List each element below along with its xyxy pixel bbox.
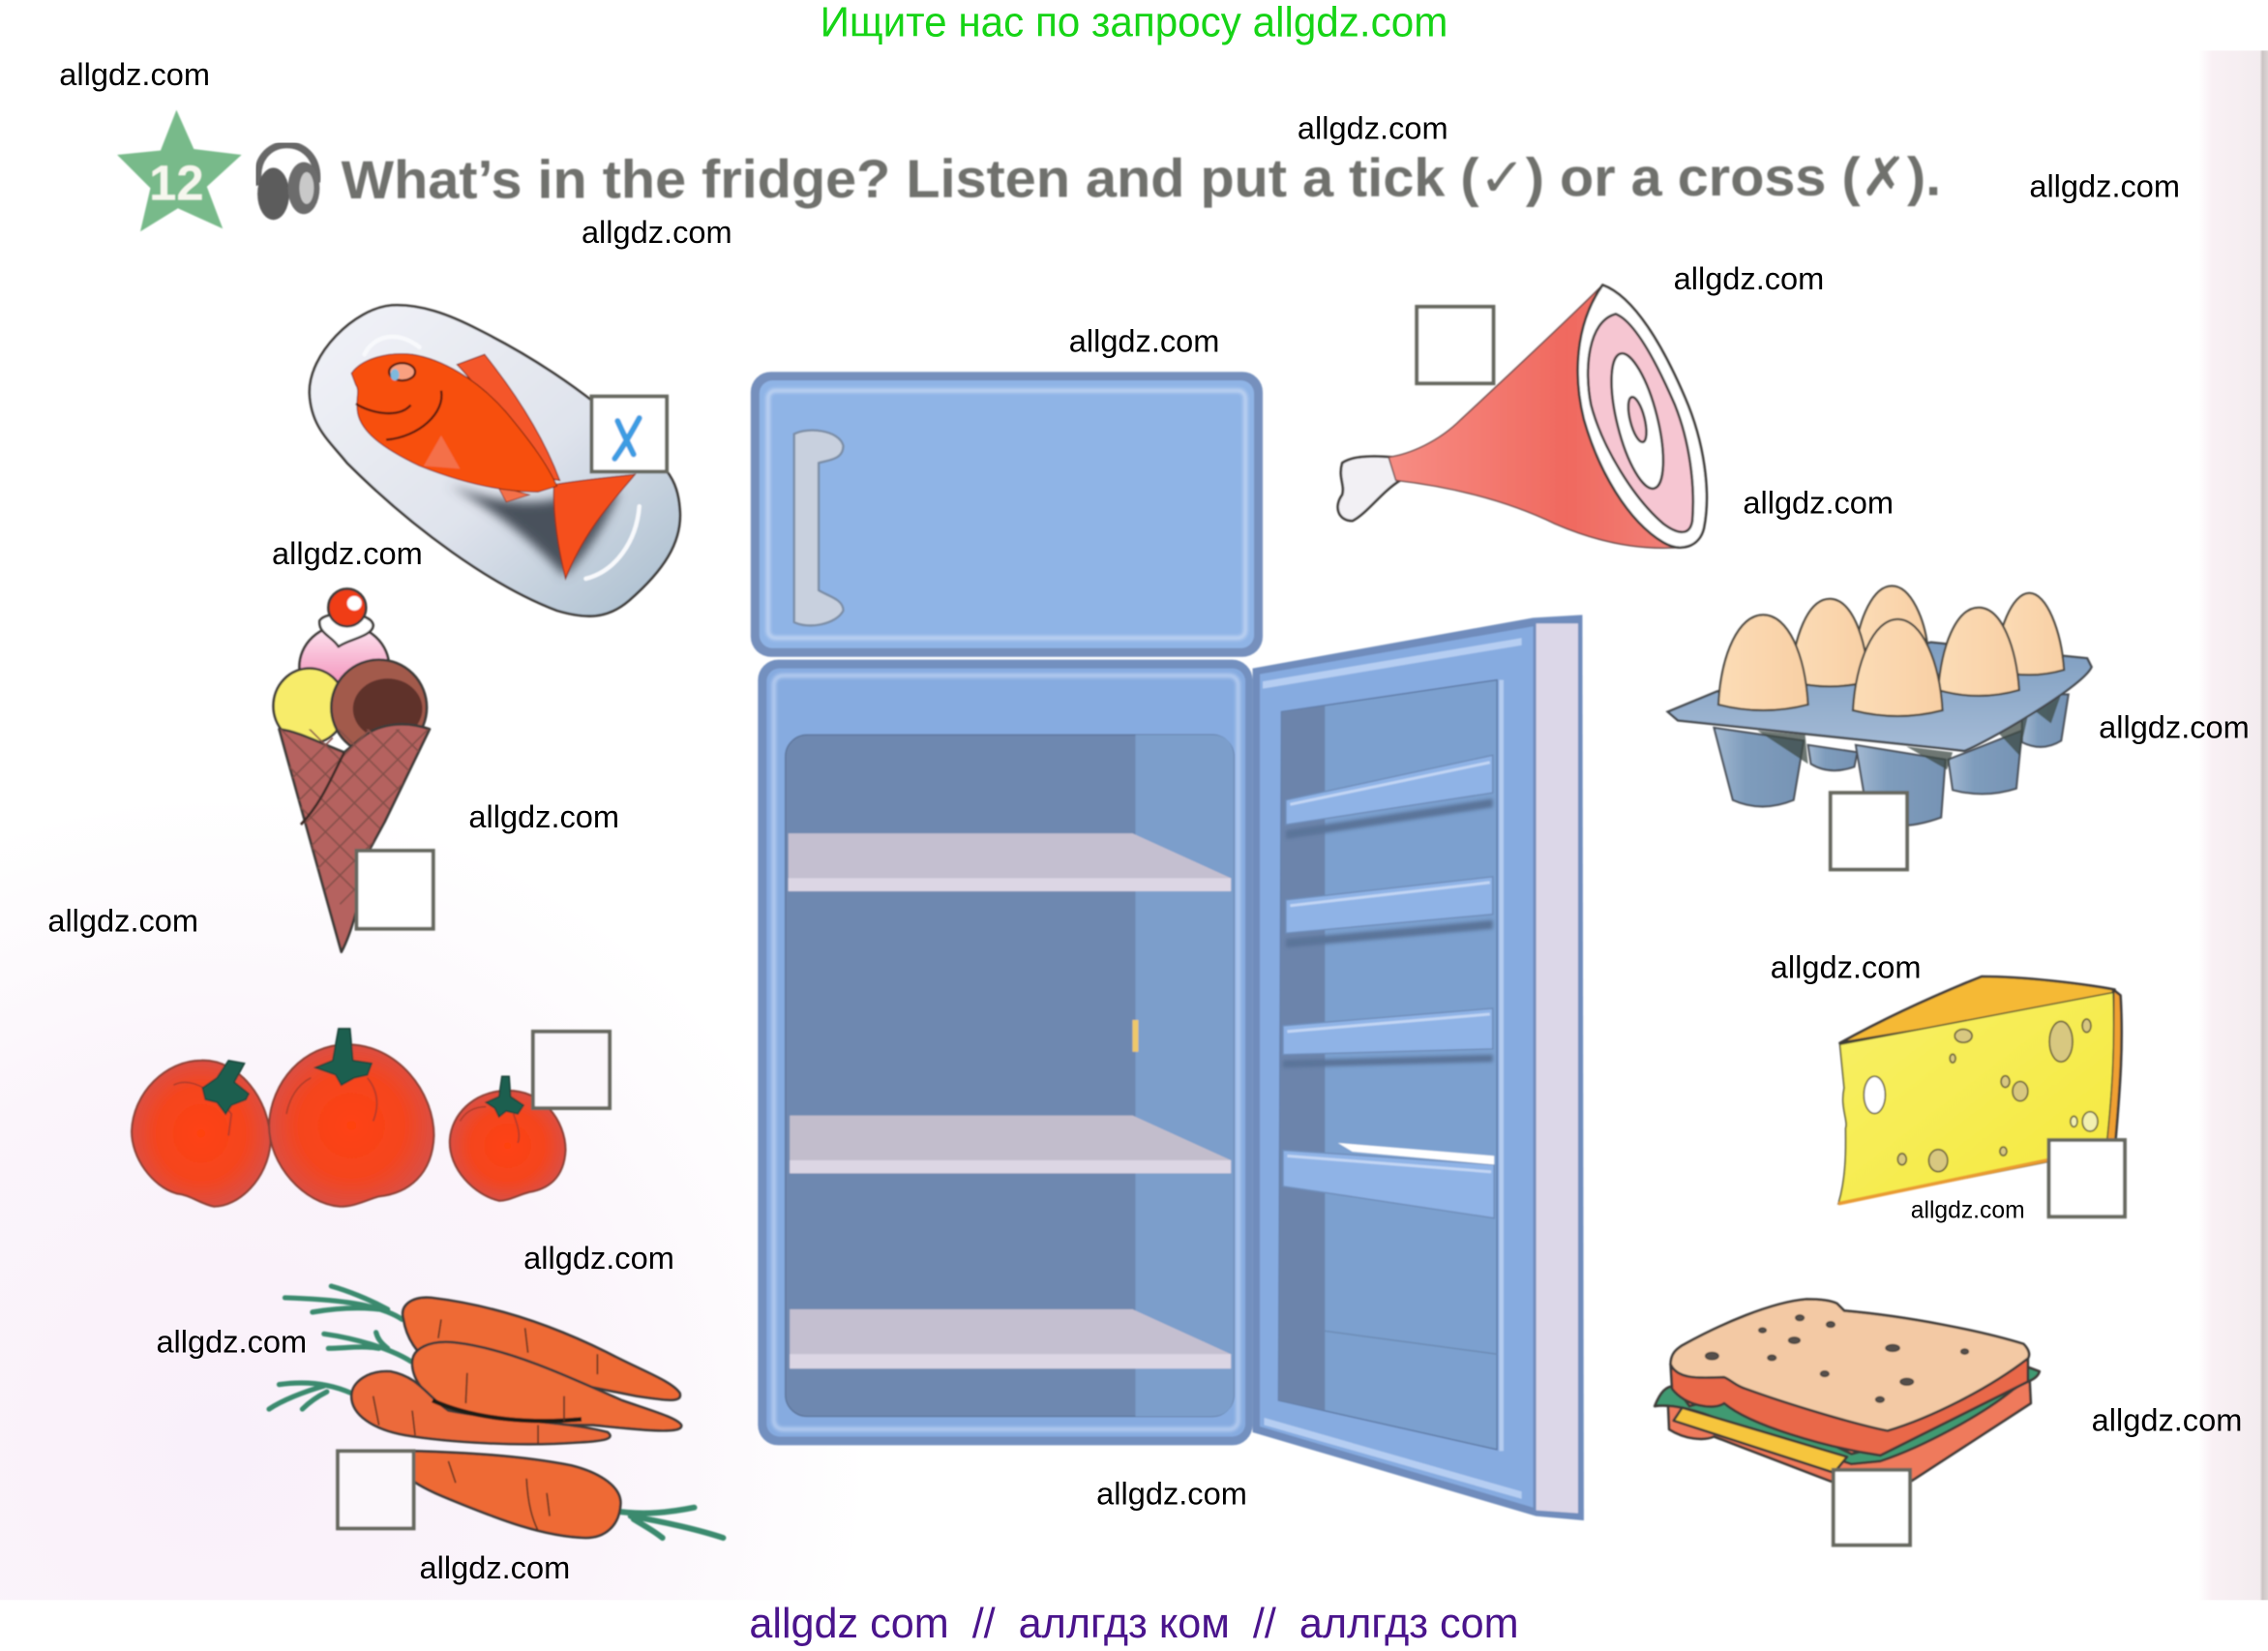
cheese right rind xyxy=(2104,990,2122,1150)
ham bone xyxy=(1338,457,1400,521)
checkbox xyxy=(533,1032,610,1108)
carrot two xyxy=(412,1342,681,1430)
open door xyxy=(1253,615,1584,1520)
tomato right xyxy=(450,1091,566,1201)
freezer handle xyxy=(794,431,844,625)
checkbox xyxy=(1831,793,1907,869)
door shelf three xyxy=(1283,1008,1493,1055)
fridge xyxy=(751,372,1584,1520)
shelf one xyxy=(789,833,1231,891)
item: fish on a plate xyxy=(310,305,680,616)
tomato left xyxy=(132,1061,271,1207)
watermarks: allgdz.com xyxy=(1069,323,1219,358)
tomato middle xyxy=(269,1044,433,1207)
exercise number star: 12 xyxy=(149,155,204,210)
watermarks: allgdz.com xyxy=(2099,709,2250,744)
top banner text: Ищите нас по запросу allgdz.com xyxy=(821,0,1447,45)
door shelf highlights xyxy=(1287,763,1491,1172)
scoops xyxy=(299,625,389,709)
watermarks: allgdz.com xyxy=(1911,1198,2025,1224)
door recess xyxy=(1278,680,1497,1450)
fish fins xyxy=(497,486,529,502)
checkbox xyxy=(356,851,433,929)
watermarks: allgdz.com xyxy=(1298,111,1448,146)
item: carrots xyxy=(269,1286,723,1538)
freezer door xyxy=(751,372,1263,657)
fish face details xyxy=(356,363,441,439)
watermarks: allgdz.com xyxy=(468,799,619,834)
waffle cone xyxy=(280,724,430,952)
item: sandwich xyxy=(1655,1299,2040,1546)
checkbox xyxy=(338,1451,414,1528)
tray cups xyxy=(1714,695,2069,826)
checkbox with blue cross xyxy=(591,397,667,471)
item: cheese xyxy=(1838,976,2125,1216)
title: What’s in the fridge? Listen and put a tick (✓) or a cross (✗). xyxy=(342,146,1941,210)
whipped cream and cherry xyxy=(319,614,373,646)
cheese holes xyxy=(1864,1019,2098,1172)
shelf three xyxy=(790,1309,1231,1368)
plate xyxy=(310,305,680,616)
item: eggs in a tray xyxy=(1668,585,2092,869)
bottom banner text: allgdz com // аллгдз ком // аллгдз com xyxy=(749,1601,1519,1647)
lettuce xyxy=(1655,1367,2040,1464)
item: ham xyxy=(1338,285,1707,548)
ham cut face xyxy=(1578,285,1707,548)
door shelf one xyxy=(1286,755,1493,825)
carrot four xyxy=(414,1451,620,1538)
carrot greens xyxy=(269,1286,723,1538)
checkbox xyxy=(1417,307,1493,383)
tomato creases xyxy=(173,1078,519,1143)
fridge interior xyxy=(786,735,1234,1417)
door shelf four xyxy=(1283,1143,1494,1218)
ham meat xyxy=(1388,285,1686,548)
top bread xyxy=(1671,1299,2029,1430)
shelf two xyxy=(790,1116,1231,1173)
top bread crust xyxy=(1671,1357,2028,1456)
watermarks: allgdz.com xyxy=(582,215,732,250)
fish tail xyxy=(553,474,635,579)
watermarks: allgdz.com xyxy=(156,1325,307,1360)
watermarks: allgdz.com xyxy=(2092,1402,2242,1437)
watermarks: allgdz.com xyxy=(523,1241,674,1276)
fish body xyxy=(351,354,557,492)
fish dorsal fin xyxy=(457,354,560,480)
item: tomatoes xyxy=(132,1029,610,1207)
watermarks: allgdz.com xyxy=(47,904,198,939)
plate rim highlights xyxy=(365,337,640,579)
eggs xyxy=(1718,585,2064,716)
watermarks: allgdz.com xyxy=(1743,486,1894,521)
cheese face xyxy=(1838,993,2114,1204)
exercise number star xyxy=(117,110,242,231)
tray shadows xyxy=(1757,695,2061,769)
bottom bread slice xyxy=(1668,1374,2031,1482)
watermarks: allgdz.com xyxy=(1771,950,1921,985)
watermarks: allgdz.com xyxy=(1674,261,1824,296)
tray top xyxy=(1668,643,2092,751)
icon: headphones xyxy=(257,144,319,220)
cheese rind top xyxy=(1840,976,2115,1043)
cheese slice xyxy=(1674,1408,1847,1473)
checkbox xyxy=(2049,1140,2125,1216)
fridge body xyxy=(758,660,1253,1445)
ham marbling xyxy=(1601,348,1674,494)
carrot three xyxy=(351,1371,611,1444)
carrot ridges xyxy=(373,1319,597,1531)
door shelf shadows xyxy=(1283,798,1493,1067)
checkbox xyxy=(1834,1470,1910,1546)
fish shadow xyxy=(448,485,619,576)
bread seeds xyxy=(1705,1315,1969,1402)
fridge light xyxy=(1133,1020,1138,1052)
tomato stems xyxy=(202,1029,523,1117)
item: ice cream cone xyxy=(274,588,441,952)
door shelf two xyxy=(1286,877,1493,933)
carrot one xyxy=(403,1298,680,1400)
watermarks: allgdz.com xyxy=(1096,1477,1247,1512)
watermarks: allgdz.com xyxy=(2029,168,2180,203)
watermarks: allgdz.com xyxy=(272,536,423,571)
watermarks: allgdz.com xyxy=(420,1550,570,1585)
watermarks: allgdz.com xyxy=(59,57,210,92)
